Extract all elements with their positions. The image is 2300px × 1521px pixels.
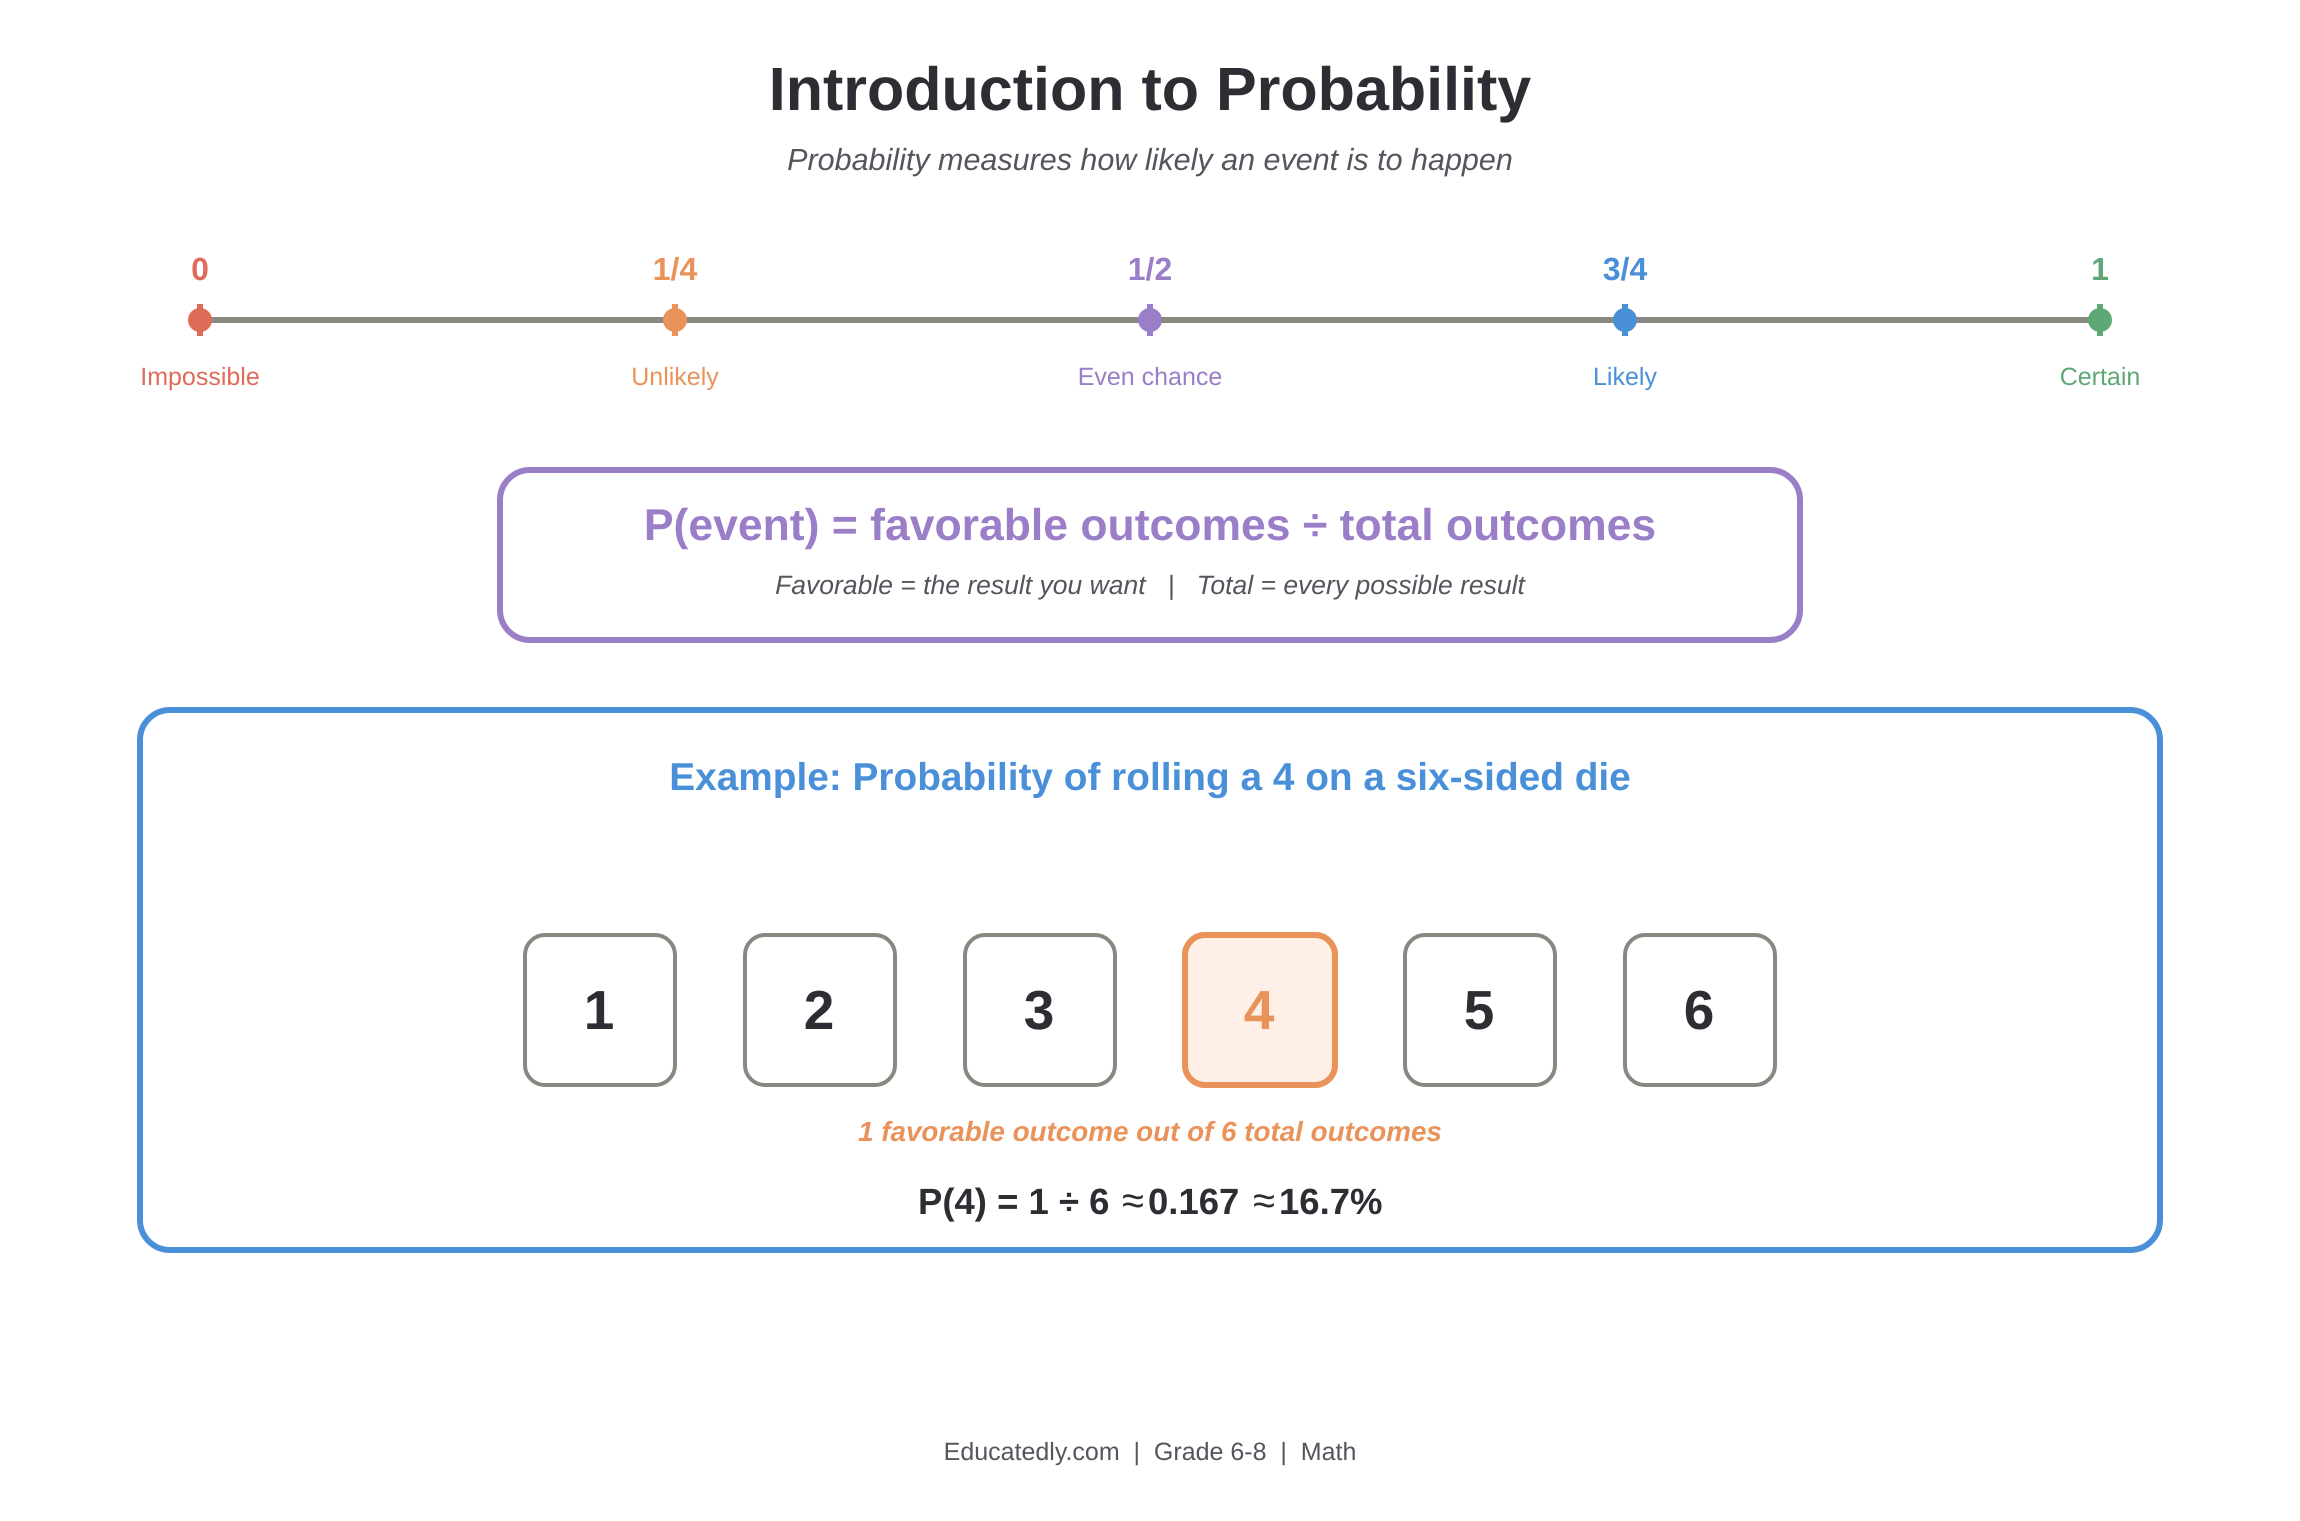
outcome 4 highlighted: 4	[1244, 979, 1275, 1041]
formula explanation: Favorable = the result you want | Total = every possible result	[775, 570, 1527, 600]
die outcomes	[525, 935, 1775, 1085]
marker: 1/4 unlikely	[631, 251, 719, 391]
favorable note: 1 favorable outcome out of 6 total outcomes	[858, 1116, 1442, 1147]
title: Introduction to Probability	[769, 55, 1531, 123]
footer: Educatedly.com | Grade 6-8 | Math	[944, 1438, 1356, 1466]
result: ≈	[1253, 1179, 1275, 1223]
result: ≈	[1122, 1179, 1144, 1223]
marker: 1/4 unlikely: Unlikely	[631, 363, 719, 391]
marker: 1 certain: 1	[2091, 251, 2109, 287]
marker: 0 impossible: 0	[191, 251, 209, 287]
outcome 2	[745, 935, 895, 1085]
scale line	[200, 317, 2100, 323]
marker: 1/4 unlikely: 1/4	[653, 251, 697, 287]
marker: 3/4 likely: 3/4	[1603, 251, 1647, 287]
panel: formula	[500, 470, 1800, 640]
marker: 3/4 likely: Likely	[1593, 363, 1657, 391]
outcome 1: 1	[584, 979, 614, 1041]
outcome 1	[525, 935, 675, 1085]
marker: 1/2 even chance: 1/2	[1128, 251, 1172, 287]
outcome 3: 3	[1024, 979, 1054, 1041]
panel: die example	[140, 710, 2160, 1250]
formula text: P(event) = favorable outcomes ÷ total outcomes	[644, 501, 1656, 550]
outcome 6: 6	[1684, 979, 1714, 1041]
outcome 2: 2	[804, 979, 834, 1041]
marker: 0 impossible: Impossible	[140, 363, 260, 391]
marker: 1/2 even chance	[1078, 251, 1222, 391]
outcome 5: 5	[1464, 979, 1494, 1041]
outcome 3	[965, 935, 1115, 1085]
outcome 4 highlighted	[1185, 935, 1335, 1085]
marker: 1/2 even chance: Even chance	[1078, 363, 1222, 391]
marker: 1 certain: Certain	[2060, 363, 2140, 391]
probability scale	[140, 251, 2140, 391]
outcome 5	[1405, 935, 1555, 1085]
marker: 0 impossible	[140, 251, 260, 391]
outcome 6	[1625, 935, 1775, 1085]
subtitle: Probability measures how likely an event is to happen	[787, 143, 1513, 177]
example heading: Example: Probability of rolling a 4 on a six-sided die	[669, 756, 1631, 799]
result: 0.167	[1148, 1181, 1239, 1222]
result: 16.7%	[1279, 1181, 1382, 1222]
result: P(4) = 1 ÷ 6	[918, 1181, 1109, 1222]
marker: 3/4 likely	[1593, 251, 1657, 391]
marker: 1 certain	[2060, 251, 2140, 391]
